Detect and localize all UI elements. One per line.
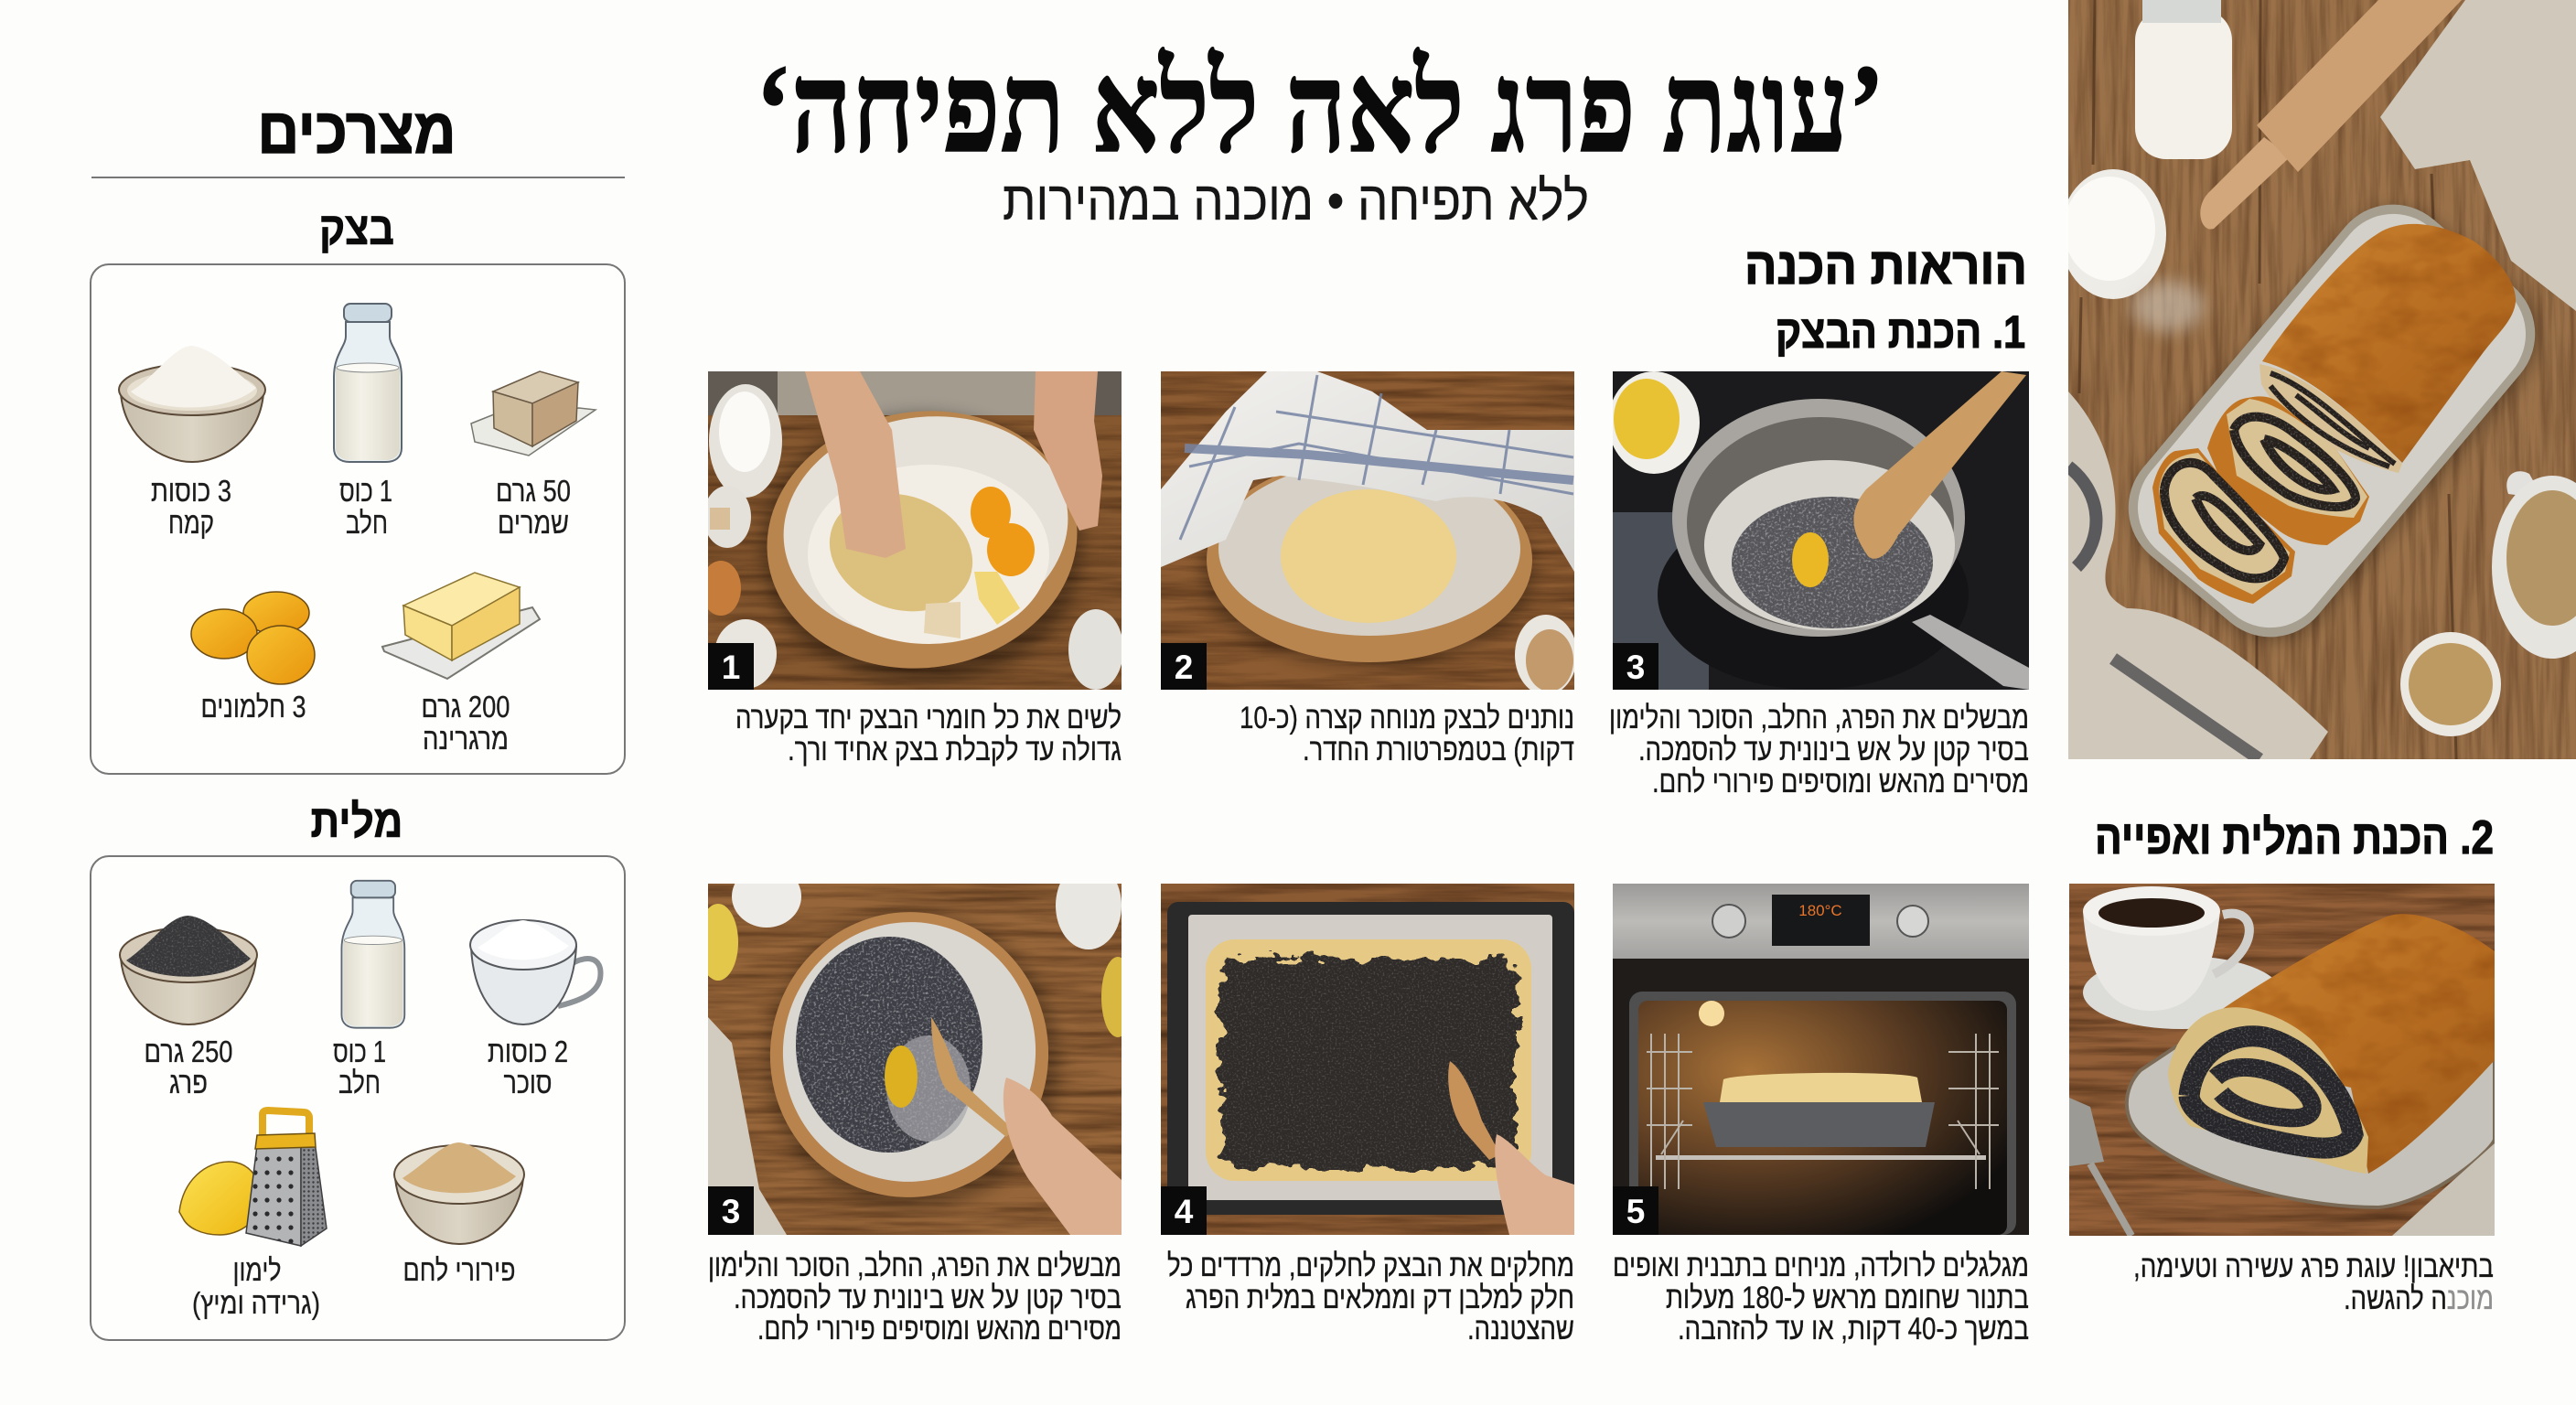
caption: step 3 bottom row: מסירים מהאש ומוסיפים פירורי לחם. [757, 1312, 1122, 1346]
caption: final serving: מוכנה להגשה. [2344, 1282, 2494, 1316]
caption: step 4: מחלקים את הבצק לחלקים, מרדדים כל [1167, 1249, 1574, 1283]
photo: final plated roll with coffee [2069, 884, 2495, 1236]
title: ’עוגת פרג לאה ללא תפיחה‘ [756, 38, 1884, 178]
label: yolks: 3 חלמונים [201, 690, 306, 724]
photo: step 1 mixing dough [701, 371, 1123, 690]
icon: margarine block [382, 573, 540, 679]
label: milk [333, 1035, 386, 1099]
caption: step 2: דקות) בטמפרטורת החדר. [1303, 733, 1574, 767]
label: margarine: 200 גרם [421, 690, 510, 724]
caption: step 4 [1167, 1249, 1574, 1346]
coffee cup [2083, 886, 2249, 1011]
label: poppy [145, 1035, 232, 1099]
subtitle: ללא תפיחה • מוכנה במהירות [1003, 170, 1589, 231]
platter [2103, 179, 2563, 666]
label: yeast [496, 474, 571, 540]
roll with spiral cut face [2168, 914, 2495, 1174]
panel: dough ingredients [91, 264, 625, 774]
caption: step 2 [1240, 701, 1574, 767]
caption: step 5: מגלגלים לרולדה, מניחים בתבנית ואופים [1613, 1249, 2029, 1283]
slice two [2152, 448, 2295, 604]
plate [2127, 1034, 2495, 1207]
caption: step 3 bottom row [708, 1249, 1122, 1346]
oven temperature display: 180°C [1798, 902, 1842, 919]
caption: step 1 [735, 701, 1122, 767]
icon: lemon and grater [179, 1110, 327, 1246]
serving spatula [2069, 1098, 2131, 1236]
icon: egg yolks [191, 592, 315, 684]
caption: step 4: חלק למלבן דק וממלאים במלית הפרג [1186, 1281, 1574, 1315]
caption: step 3 bottom row: מבשלים את הפרג, החלב, הסוכר והלימון [708, 1249, 1122, 1283]
label: flour: 3 כוסות [151, 474, 231, 508]
caption: step 5: בתנור שחומם מראש ל-180 מעלות [1666, 1281, 2029, 1315]
label: lemon: לימון [232, 1253, 282, 1287]
label: lemon [192, 1253, 320, 1320]
label: poppy: 250 גרם [145, 1035, 232, 1068]
coffee cup [2492, 471, 2576, 659]
label: milk [339, 474, 392, 540]
slice one [2207, 396, 2369, 545]
ingredients heading: מצרכים [258, 95, 456, 166]
caption: final serving [2133, 1249, 2494, 1316]
label: flour: קמח [168, 506, 214, 540]
icon: bread crumbs bowl [394, 1142, 524, 1244]
label: milk: חלב [346, 506, 388, 540]
photo: finished poppy roll on platter [2060, 0, 2576, 759]
label: margarine: מרגרינה [423, 722, 509, 756]
step number 2: 2 [1175, 649, 1193, 686]
label: sugar: סוכר [503, 1066, 553, 1099]
label: milk: חלב [338, 1066, 381, 1099]
caption: step 1: גדולה עד לקבלת בצק אחיד ורך. [788, 733, 1122, 767]
linen towel, top right [2380, 0, 2576, 311]
whole roll [2259, 224, 2516, 473]
label: flour [151, 474, 231, 540]
label: yeast: 50 גרם [496, 474, 571, 508]
step number 3 [708, 1186, 754, 1235]
label: margarine [421, 690, 510, 756]
label: sugar: 2 כוסות [488, 1035, 568, 1068]
label: lemon: (גרידה ומיץ) [192, 1286, 320, 1320]
rolling pin [2200, 0, 2462, 230]
step number 5: 5 [1626, 1193, 1645, 1230]
caption: final serving: בתיאבון! עוגת פרג עשירה וטעימה, [2133, 1249, 2494, 1284]
filling sub-heading: מלית [311, 796, 402, 847]
label: milk: 1 כוס [339, 474, 392, 508]
photo: step 3 cooking poppy in pot [1608, 371, 2029, 690]
heading: step group 2: 2. הכנת המלית ואפייה [2095, 811, 2494, 864]
icon: cup of sugar [470, 920, 601, 1024]
caption: step 2: נותנים לבצק מנוחה קצרה (כ-10 [1240, 701, 1574, 735]
step number 3: 3 [722, 1193, 740, 1230]
label: bread crumbs: פירורי לחם [402, 1253, 516, 1287]
crumbs bowl [2400, 632, 2501, 736]
panel: ingredients column [91, 95, 625, 1340]
step number 5 [1613, 1186, 1658, 1235]
caption: step 3 top row: מסירים מהאש ומוסיפים פירורי לחם. [1652, 765, 2029, 799]
caption: step 5: במשך כ-40 דקות, או עד להזהבה. [1678, 1312, 2029, 1346]
step number 1 [708, 643, 754, 690]
milk jar [2135, 0, 2232, 159]
icon: flour bowl [119, 346, 265, 462]
linen towel, bottom left [2068, 391, 2328, 759]
photo: step 3 stirring poppy filling [708, 884, 1122, 1235]
photo: step 2 resting dough [1161, 371, 1577, 695]
step number 3: 3 [1626, 649, 1645, 686]
label: poppy: פרג [169, 1066, 208, 1099]
caption: step 3 bottom row: בסיר קטן על אש בינונית עד להסמכה. [734, 1281, 1122, 1315]
label: milk: 1 כוס [333, 1035, 386, 1068]
heading: preparation instructions: הוראות הכנה [1744, 237, 2027, 295]
label: yeast: שמרים [498, 506, 569, 540]
panel: filling ingredients [91, 856, 625, 1340]
caption: step 3 top row: בסיר קטן על אש בינונית עד להסמכה. [1638, 733, 2029, 767]
heading: step group 1: 1. הכנת הבצק [1776, 306, 2025, 358]
caption: step 3 top row [1609, 701, 2029, 799]
photo: step 4 spreading filling on dough [1161, 884, 1574, 1235]
photo: step 5 baking in oven [1613, 884, 2029, 1235]
icon: milk bottle [341, 881, 404, 1028]
dough sub-heading: בצק [319, 203, 394, 254]
step number 3 [1613, 643, 1658, 690]
caption: step 1: לשים את כל חומרי הבצק יחד בקערה [735, 701, 1122, 735]
caption: step 4: שהצטננה. [1467, 1312, 1574, 1346]
icon: milk bottle [334, 304, 402, 462]
step number 4 [1161, 1186, 1207, 1235]
sugar bowl [2060, 169, 2166, 299]
step number 2 [1161, 643, 1207, 690]
step number 1: 1 [722, 649, 740, 686]
caption: step 3 top row: מבשלים את הפרג, החלב, הסוכר והלימון [1609, 701, 2029, 735]
icon: yeast block [471, 371, 596, 456]
step number 4: 4 [1175, 1193, 1194, 1230]
label: sugar [488, 1035, 568, 1099]
caption: step 5 [1613, 1249, 2029, 1346]
icon: poppy seed bowl [120, 916, 257, 1024]
